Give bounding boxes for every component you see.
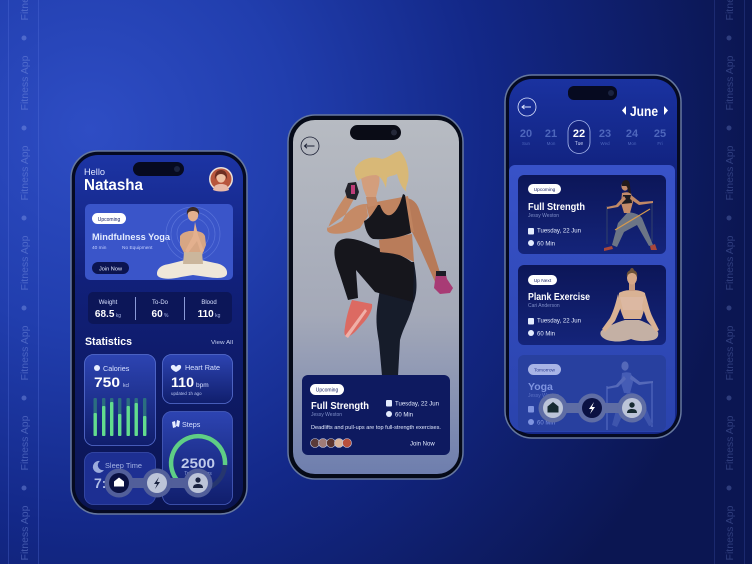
pill: upcoming: Upcoming xyxy=(316,388,338,394)
month selector xyxy=(622,104,668,119)
card details xyxy=(92,245,153,251)
card: plank exercise: Up Next xyxy=(534,278,552,284)
date strip: Mon xyxy=(547,141,556,146)
steps card: 2500 xyxy=(181,456,215,471)
card: full strength: 60 Min xyxy=(537,242,555,248)
left vertical brand strip: Fitness App xyxy=(19,145,31,200)
profile icon xyxy=(188,473,208,493)
date strip: Tue xyxy=(575,141,583,147)
home icon xyxy=(543,398,563,418)
date and duration: Tuesday, 22 Jun xyxy=(395,402,439,408)
notch xyxy=(133,162,184,176)
avatar xyxy=(209,167,233,192)
to-do: 60 % xyxy=(152,309,169,320)
date strip: Wed xyxy=(600,141,610,146)
blood: 110 kg xyxy=(198,309,221,320)
calories card: 750 xyxy=(94,374,120,390)
featured card: mindfulness yoga xyxy=(85,204,233,280)
notch xyxy=(350,125,401,140)
phone 2: workout detail xyxy=(288,115,463,479)
band workout woman illustration xyxy=(604,180,657,251)
home icon xyxy=(109,473,129,493)
card: yoga (faded): Yoga xyxy=(528,381,553,393)
heart rate card: bpm xyxy=(196,382,209,389)
weight: 68.5 kg xyxy=(95,309,121,320)
card: plank exercise: 60 Min xyxy=(537,332,555,338)
description: Deadlifts and pull-ups are top full-strength exercises. xyxy=(311,425,441,431)
midriff xyxy=(379,234,414,262)
profile icon xyxy=(622,398,642,418)
sleep time card xyxy=(84,452,156,504)
date strip: 24 xyxy=(626,128,639,140)
schedule panel xyxy=(509,165,675,432)
weight xyxy=(95,300,121,320)
steps card xyxy=(162,412,232,504)
join now button xyxy=(92,262,129,274)
steps ring xyxy=(171,436,225,490)
bar chart xyxy=(94,398,146,436)
blood xyxy=(198,300,221,320)
raised arm xyxy=(327,195,368,234)
left vertical brand strip: Fitness App xyxy=(19,55,31,110)
workout info card xyxy=(302,375,450,455)
standing leg xyxy=(376,262,416,376)
phone 3: schedule xyxy=(505,75,681,438)
calories card: Calories xyxy=(103,364,130,373)
bra xyxy=(364,194,411,239)
card: yoga (faded): Jessy Weston xyxy=(528,393,559,399)
to-do xyxy=(152,300,169,320)
stats row xyxy=(88,292,232,324)
date strip xyxy=(520,120,666,154)
card: yoga (faded) xyxy=(518,355,666,431)
card: yoga (faded): Tomorrow xyxy=(534,368,556,374)
card: full strength: Tuesday, 22 Jun xyxy=(537,228,581,234)
yoga woman illustration xyxy=(157,207,227,279)
statistics heading: View All xyxy=(211,340,233,346)
card: full strength: Full Strength xyxy=(528,202,585,213)
back button xyxy=(301,137,319,155)
torso xyxy=(366,196,414,232)
card details: 40 min xyxy=(92,245,107,251)
right vertical brand strip xyxy=(714,0,745,564)
bottom navigation xyxy=(104,468,212,498)
head and hair xyxy=(361,175,380,197)
greeting: Natasha xyxy=(84,177,143,194)
bolt icon xyxy=(147,473,167,493)
heart rate card: 110 xyxy=(171,374,194,390)
workout title: Full Strength xyxy=(311,401,369,412)
bolt icon xyxy=(582,398,602,418)
raised leg xyxy=(334,239,414,302)
blood: Blood xyxy=(201,300,217,306)
pill: upcoming xyxy=(92,213,126,224)
sleep time card: 7: xyxy=(94,475,106,491)
participant avatars xyxy=(310,438,352,448)
right vertical brand strip: Fitness App xyxy=(724,505,736,560)
left vertical brand strip: Fitness App xyxy=(19,505,31,560)
heart rate card xyxy=(162,354,232,404)
card: full strength: Jessy Weston xyxy=(528,213,559,219)
join now button: Join Now xyxy=(99,266,123,272)
to-do: To-Do xyxy=(152,300,169,306)
weight: Weight xyxy=(99,300,118,306)
left vertical brand strip: Fitness App xyxy=(19,235,31,290)
workout title: Jessy Weston xyxy=(311,412,342,418)
date strip: 20 xyxy=(520,128,532,140)
date strip: 23 xyxy=(599,128,611,140)
glove right xyxy=(434,274,453,294)
bottom navigation xyxy=(538,394,646,422)
date and duration xyxy=(386,400,439,418)
phone 1: home screen xyxy=(71,151,247,514)
month selector: June xyxy=(630,104,658,119)
card: plank exercise: Cari Anderson xyxy=(528,303,560,309)
glove left xyxy=(345,182,359,200)
card: full strength xyxy=(518,175,666,254)
steps card: Steps xyxy=(182,420,201,429)
workout title xyxy=(311,401,369,418)
date and duration: 60 Min xyxy=(395,412,413,418)
date strip: Fri xyxy=(657,141,663,146)
card: yoga (faded): 60 Min xyxy=(537,420,555,426)
athlete photo illustration xyxy=(327,151,453,376)
steps card: Today Steps xyxy=(184,471,212,477)
shoe xyxy=(344,300,372,337)
sleep time card: Sleep Time xyxy=(105,461,142,470)
pill: upcoming xyxy=(310,384,344,395)
card: full strength: Upcoming xyxy=(534,187,556,193)
card: plank exercise: Plank Exercise xyxy=(528,292,590,303)
card title: Mindfulness Yoga xyxy=(92,232,171,243)
greeting xyxy=(84,167,143,194)
left vertical brand strip: Fitness App xyxy=(19,325,31,380)
greeting: Hello xyxy=(84,167,105,178)
left vertical brand strip: Fitness App xyxy=(19,415,31,470)
statistics heading: Statistics xyxy=(85,336,132,348)
calories card xyxy=(84,354,156,446)
date strip: Sun xyxy=(522,141,530,146)
date strip: Mon xyxy=(628,141,637,146)
right vertical brand strip: Fitness App xyxy=(724,145,736,200)
far arm xyxy=(408,198,440,282)
notch xyxy=(568,86,617,100)
right vertical brand strip: Fitness App xyxy=(724,55,736,110)
card: plank exercise xyxy=(518,265,666,345)
statistics heading xyxy=(85,336,233,348)
date strip: 25 xyxy=(654,128,666,140)
calories card: kcl xyxy=(123,383,129,389)
date strip: 21 xyxy=(545,128,557,140)
right vertical brand strip: Fitness App xyxy=(724,235,736,290)
right vertical brand strip: Fitness App xyxy=(724,415,736,470)
meditation woman illustration xyxy=(600,268,659,342)
card details: No Equipment xyxy=(122,245,153,251)
date strip: 22 xyxy=(573,128,585,140)
heart rate card: Heart Rate xyxy=(185,363,220,372)
faded band woman illustration xyxy=(607,361,653,430)
join now: Join Now xyxy=(410,442,435,448)
right vertical brand strip: Fitness App xyxy=(724,325,736,380)
pill: upcoming: Upcoming xyxy=(98,217,120,223)
card: plank exercise: Tuesday, 22 Jun xyxy=(537,318,581,324)
back button xyxy=(518,98,536,116)
left vertical brand strip xyxy=(8,0,39,564)
heart rate card: updated 1h ago xyxy=(171,391,202,396)
